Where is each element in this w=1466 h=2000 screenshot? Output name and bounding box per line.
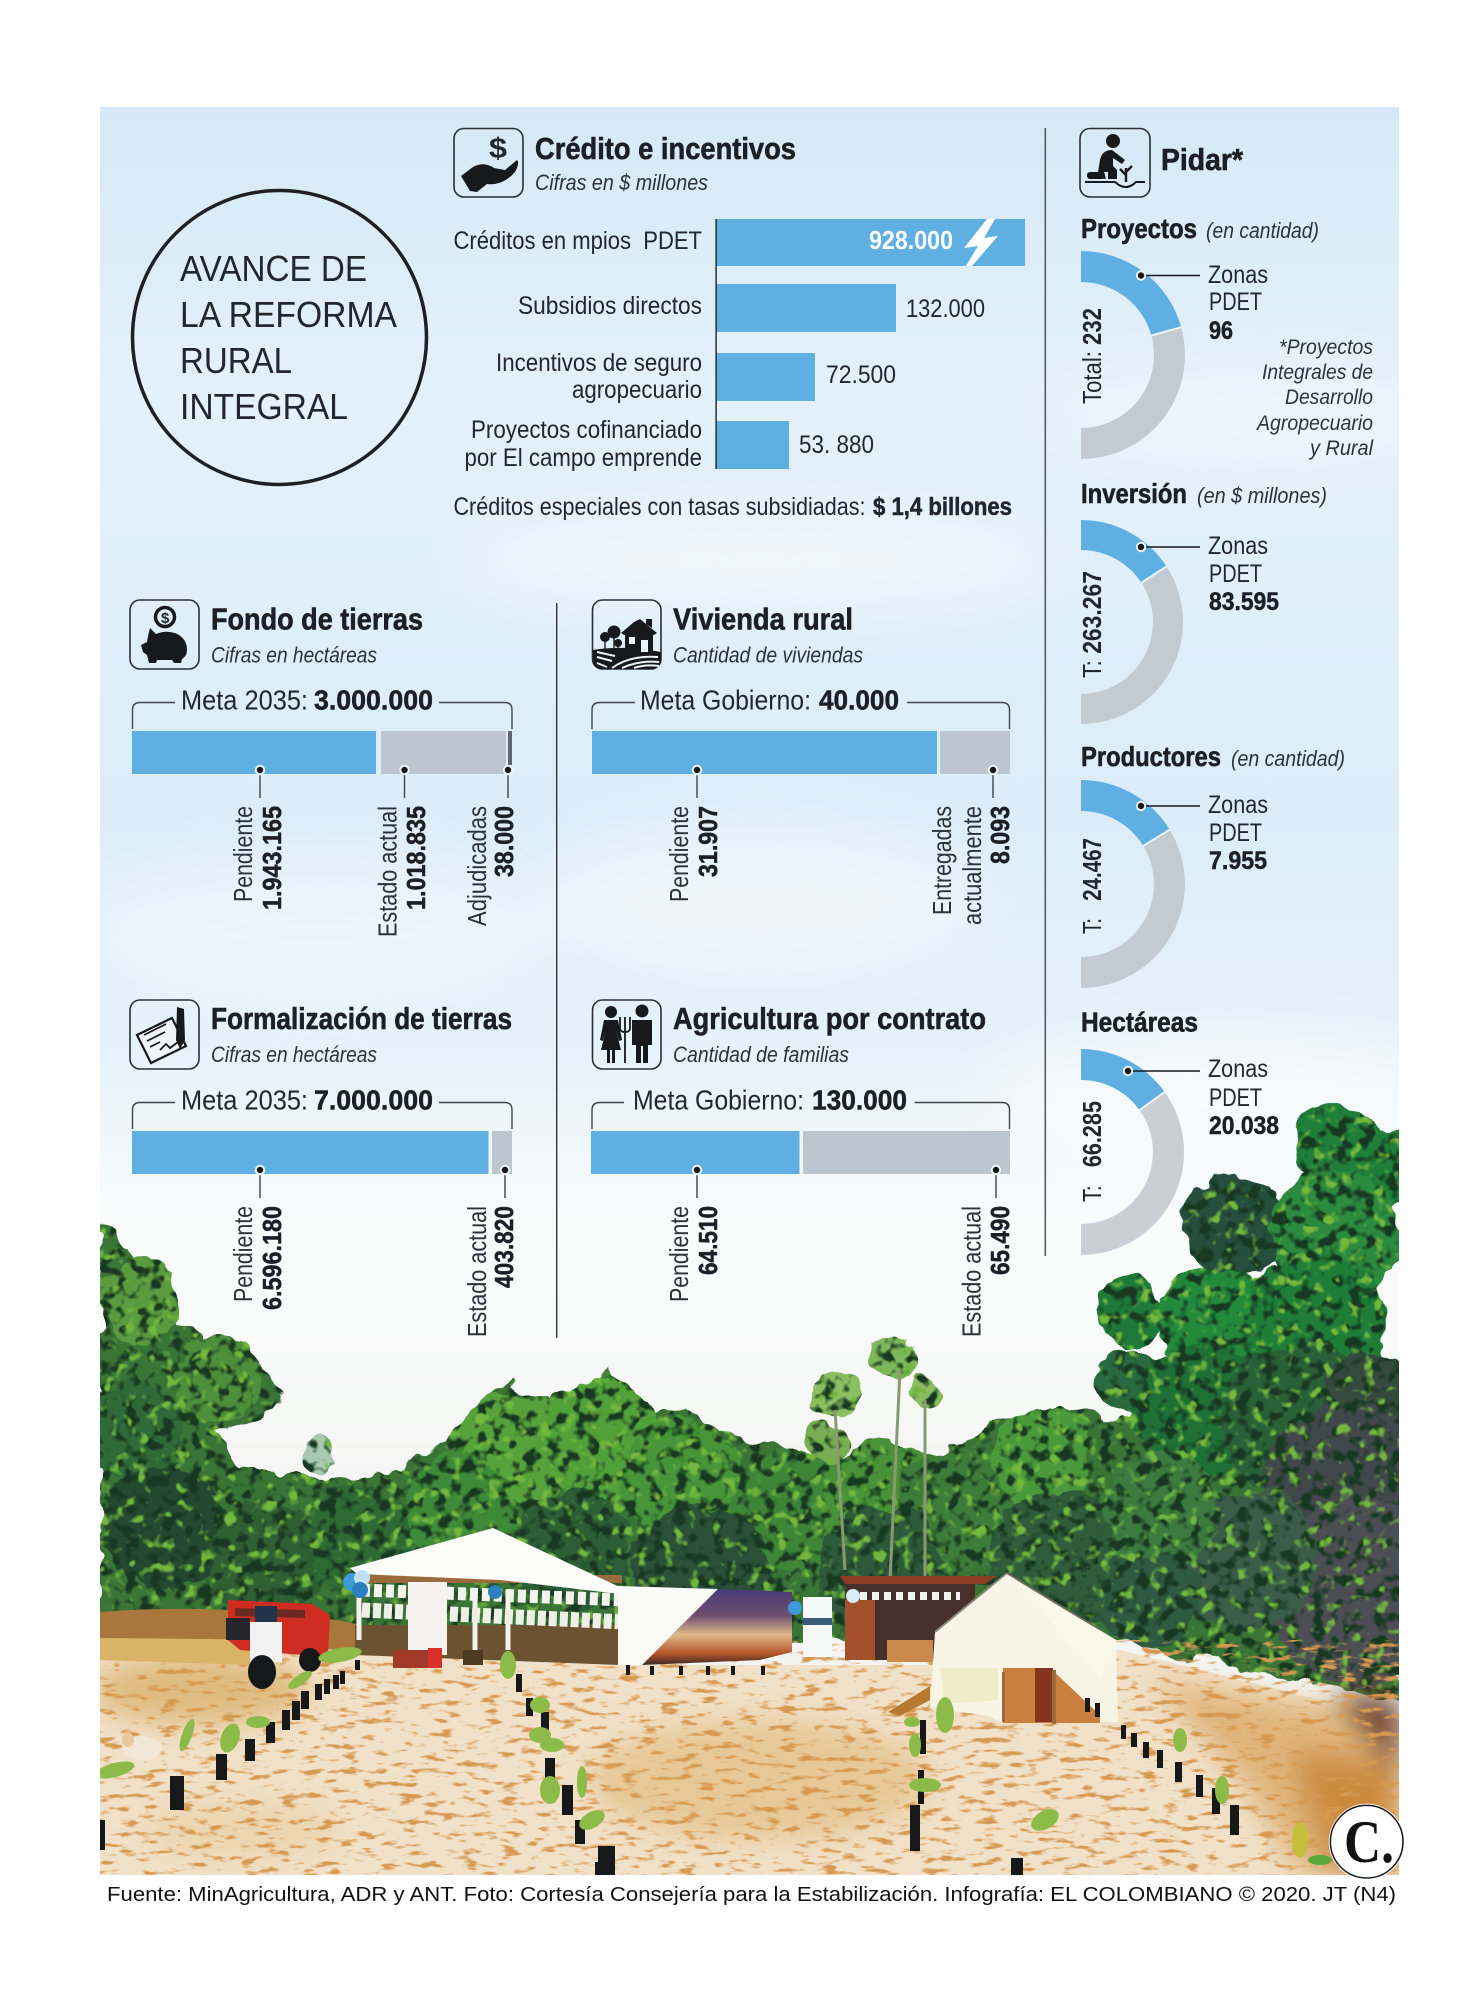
data labels: Pendiente [228,806,258,902]
heading: Vivienda rural [673,601,853,636]
data labels: 65.490 [985,1206,1015,1275]
banners and signs [618,1576,997,1665]
data labels: Estado actual [462,1206,492,1337]
subtitle: Cifras en hectáreas [211,1042,377,1067]
greenhouse [930,1573,1118,1724]
data labels: 8.093 [985,806,1015,864]
bar chart: agropecuario [572,376,702,404]
heading: (en cantidad) [1231,746,1345,771]
data labels: Pendiente [228,1206,258,1302]
title text: LA REFORMA [180,294,397,335]
bar chart: 132.000 [906,295,985,323]
donut: productores: Zonas [1208,791,1268,819]
data labels: Estado actual [372,806,402,937]
stacked bar [132,1131,512,1198]
subtitle: Cifras en hectáreas [211,642,377,668]
data labels: 1.943.165 [257,806,287,910]
goal bracket: 40.000 [819,684,899,715]
donut: inversión: T: 263.267 [1077,571,1107,678]
heading: Agricultura por contrato [673,1001,986,1036]
footnote [1255,336,1374,460]
bar chart: 53. 880 [799,431,874,459]
thin trees over the treeline [304,1336,943,1471]
donut: inversión [1077,478,1327,724]
donut: productores: PDET [1209,819,1262,847]
data labels: 31.907 [693,806,723,877]
data labels: Estado actual [956,1206,986,1337]
bar chart: Incentivos de seguro [496,349,702,377]
panel: formalización de tierras [130,1000,519,1337]
tent [343,1528,626,1668]
donut: hectáreas: Zonas [1208,1055,1268,1083]
heading: Fondo de tierras [211,601,423,636]
icon: hand with coin: $ [489,133,507,165]
donut: proyectos: 96 [1209,317,1233,345]
icon: farmer planting [1080,128,1150,197]
footnote: Desarrollo [1285,386,1373,409]
soil [100,1640,1399,1875]
data labels: Pendiente [664,1206,694,1302]
heading [1081,213,1319,244]
heading: Crédito e incentivos [535,131,796,166]
heading: (en $ millones) [1197,483,1327,508]
heading: Formalización de tierras [211,1001,512,1036]
bar chart: Créditos en mpios PDET [454,227,702,255]
footnote: Agropecuario [1255,412,1373,435]
bar chart: 72.500 [826,361,896,389]
donut: proyectos: PDET [1209,288,1262,316]
donut: inversión: 83.595 [1209,588,1279,616]
data labels: actualmente [957,806,987,925]
goal bracket: 3.000.000 [314,684,433,715]
icon: piggy bank: $ [161,610,170,627]
bar chart: Subsidios directos [518,292,702,320]
icon: signed contract and pen [130,1000,199,1069]
source credit: Fuente: MinAgricultura, ADR y ANT. Foto: Cortesía Consejería para la Estabilización. Infografía: EL COLOMBIANO © 2020. JT (N4) [107,1883,1396,1906]
heading: Proyectos [1081,213,1197,244]
red motorcycle truck [226,1600,330,1689]
icon: hand with coin [454,128,523,197]
note: créditos especiales: Créditos especiales con tasas subsidiadas: [454,493,866,521]
bar chart [454,219,1025,472]
goal bracket [132,684,512,729]
donut: hectáreas: PDET [1209,1084,1262,1112]
heading: Hectáreas [1081,1006,1198,1037]
goal bracket [592,1084,1010,1129]
donut: hectáreas: T: 66.285 [1077,1101,1107,1202]
subtitle: Cantidad de viviendas [673,642,863,668]
subtitle: Cantidad de familias [673,1042,849,1067]
note: créditos especiales: $ 1,4 billones [873,493,1012,521]
title circle [132,190,426,484]
panel: fondo de tierras [130,600,519,937]
donut: productores: 7.955 [1209,847,1267,875]
data labels: 64.510 [693,1206,723,1275]
subtitle: Cifras en $ millones [535,170,708,195]
column dividers [556,128,1046,1338]
data labels [228,1206,519,1337]
break mark [964,219,998,266]
title text [180,248,397,427]
data labels: Adjudicadas [462,806,492,926]
goal bracket: Meta 2035: [181,684,308,715]
goal bracket: 130.000 [812,1084,907,1115]
donut: hectáreas: 20.038 [1209,1112,1279,1140]
icon: farming couple [592,1000,661,1069]
donut: productores: T: 24.467 [1077,838,1107,934]
donut: proyectos [1077,213,1319,459]
data labels [664,1206,1015,1337]
rows of plants in black pots [94,1644,1332,1875]
panel: vivienda rural [592,600,1015,925]
title text: INTEGRAL [180,386,348,427]
icon: piggy bank [130,600,199,669]
panel: pidar [1077,128,1374,1255]
data labels: 403.820 [489,1206,519,1288]
donut: inversión: Zonas [1208,532,1268,560]
panel: agricultura por contrato [591,1000,1015,1337]
icon: house and fields [592,600,661,669]
footnote: Integrales de [1262,361,1373,384]
data labels: 1.018.835 [401,806,431,910]
stacked bar [132,731,512,798]
footnote: y Rural [1308,437,1374,460]
data labels [664,806,1015,925]
bar chart: por El campo emprende [464,444,702,472]
heading [1081,478,1327,509]
data labels: 6.596.180 [257,1206,287,1310]
stacked bar [591,1131,1010,1198]
panel: crédito e incentivos [454,128,1025,521]
heading [1081,741,1345,772]
donut: inversión: PDET [1209,560,1262,588]
data labels: 38.000 [489,806,519,877]
stacked bar [592,731,1010,798]
heading: (en cantidad) [1206,218,1319,243]
data labels: Pendiente [664,806,694,902]
goal bracket [132,1084,512,1129]
donut: hectáreas [1077,1006,1279,1255]
goal bracket: Meta Gobierno: [640,684,811,715]
heading: Productores [1081,741,1221,772]
goal bracket [592,684,1010,729]
title text: AVANCE DE [180,248,367,289]
footnote: *Proyectos [1279,336,1373,359]
logo: El Colombiano: C. [1344,1809,1394,1875]
data labels: Entregadas [927,806,957,915]
data labels [228,806,519,937]
donut: productores [1077,741,1345,988]
goal bracket: Meta Gobierno: [633,1084,804,1115]
bar chart: Proyectos cofinanciado [471,416,702,444]
title text: RURAL [180,340,292,381]
right tree [1094,1103,1399,1689]
goal bracket: 7.000.000 [314,1084,433,1115]
donut: proyectos: Zonas [1208,261,1268,289]
donut: proyectos: Total: 232 [1077,308,1107,404]
heading: Inversión [1081,478,1187,509]
logo: El Colombiano [1329,1804,1405,1880]
heading: Pidar* [1161,142,1244,177]
value 928.000: 928.000 [869,225,953,255]
goal bracket: Meta 2035: [181,1084,308,1115]
